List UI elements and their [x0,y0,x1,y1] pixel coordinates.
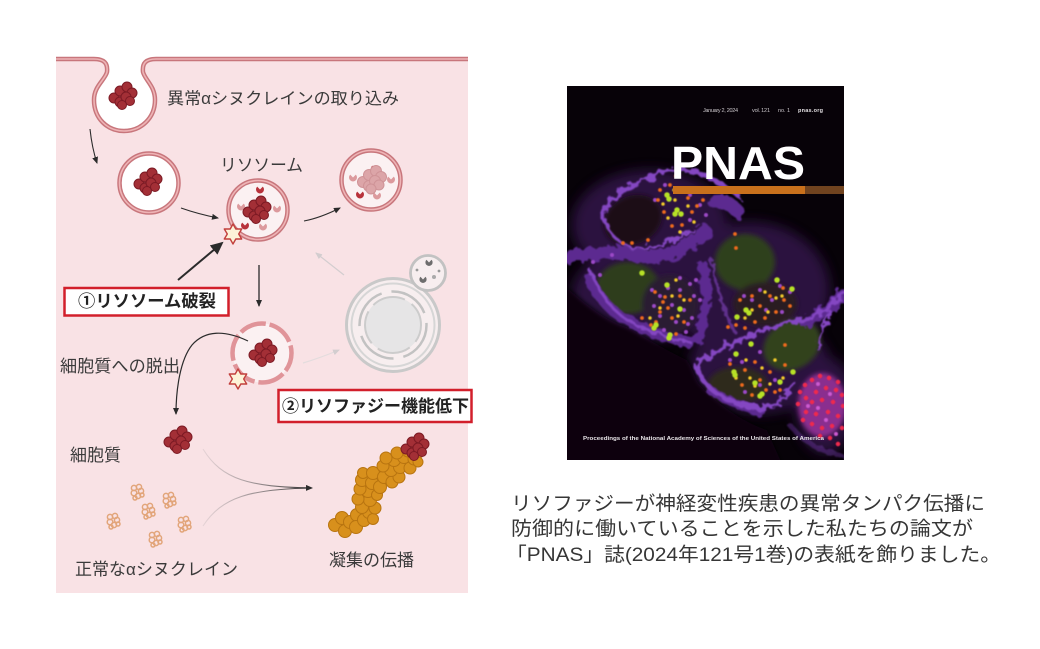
cell membrane with endocytic pit [56,50,468,131]
vesicle with aggregate [120,154,178,212]
cover issue: no. 1 [778,108,790,114]
cover volume: vol. 121 [752,108,770,114]
lysosome with degraded aggregate [342,150,400,210]
white extracellular strip [56,50,468,57]
bright cell outlines [590,169,843,456]
arrow: faded autophagy return [316,253,344,275]
broad cell outlines [570,202,843,412]
caption text [506,493,1001,566]
callout: lysophagy impairment: ②リソファジー機能低下 [282,396,469,416]
arrows: merging toward fibril [203,449,312,526]
arrow: vesicle to lysosome [181,208,218,218]
cover url: pnas.org [798,108,823,114]
label: spread of aggregation: 凝集の伝播 [329,551,414,570]
label: leakage into cytoplasm: 細胞質への脱出 [60,357,180,376]
panel background [56,57,468,593]
dark lower-left corner [568,290,739,417]
lysosome with aggregate [228,180,288,240]
star: rupture site 2 [229,369,247,389]
star: rupture site [224,224,242,244]
green puncta [642,195,793,396]
arrow: faded to autophagosome [303,350,339,363]
red cell cluster [798,373,846,444]
autophagosome [346,278,440,372]
caption text: 「PNAS」誌(2024年121号1巻)の表紙を飾りました。 [506,544,1001,566]
aggregate in pit [109,82,137,110]
journal cover: PNAS [560,86,855,470]
callout: lysosome rupture [64,288,228,316]
cover background [567,86,844,460]
cover footer: Proceedings of the National Academy of Sciences of the United States of America [583,436,825,442]
orange title bar [673,186,844,194]
callout: lysosome rupture: ①リソソーム破裂 [78,292,216,311]
arrow: rupture [178,243,222,280]
arrow: lysosome to broken lysosome [258,265,260,306]
callout: lysophagy impairment [278,390,472,422]
nuclei [596,186,830,403]
cover dateline: January 2, 2024 [703,108,738,114]
aggregate seed on fibril tip [401,433,429,460]
panel: alpha-synuclein pathway diagram [56,50,472,593]
label: lysosome: リソソーム [220,156,303,175]
caption text: 防御的に働いていることを示した私たちの論文が [511,518,973,540]
label: cytoplasm: 細胞質 [70,446,121,465]
purple haze [572,170,855,453]
broken lysosome [232,324,292,382]
yellow puncta [650,190,783,386]
red-orange puncta [623,176,790,395]
fibril aggregate [328,445,424,538]
label: normal alpha-synuclein: 正常なαシヌクレイン [75,560,238,579]
arrow: pit to vesicle [90,129,97,163]
label: uptake: 異常αシヌクレインの取り込み [167,89,399,108]
arrow: lysosome to degraded lysosome [304,208,340,221]
arrow: leakage into cytosol [176,333,248,414]
cover masthead: PNAS [671,137,805,189]
aggregate in cytosol [164,426,192,454]
small lysosome docking [410,256,446,290]
purple puncta [593,185,790,392]
micrograph [560,169,855,470]
caption text: リソファジーが神経変性疾患の異常タンパク伝播に [511,493,985,515]
normal alpha-synuclein monomers [107,484,191,547]
